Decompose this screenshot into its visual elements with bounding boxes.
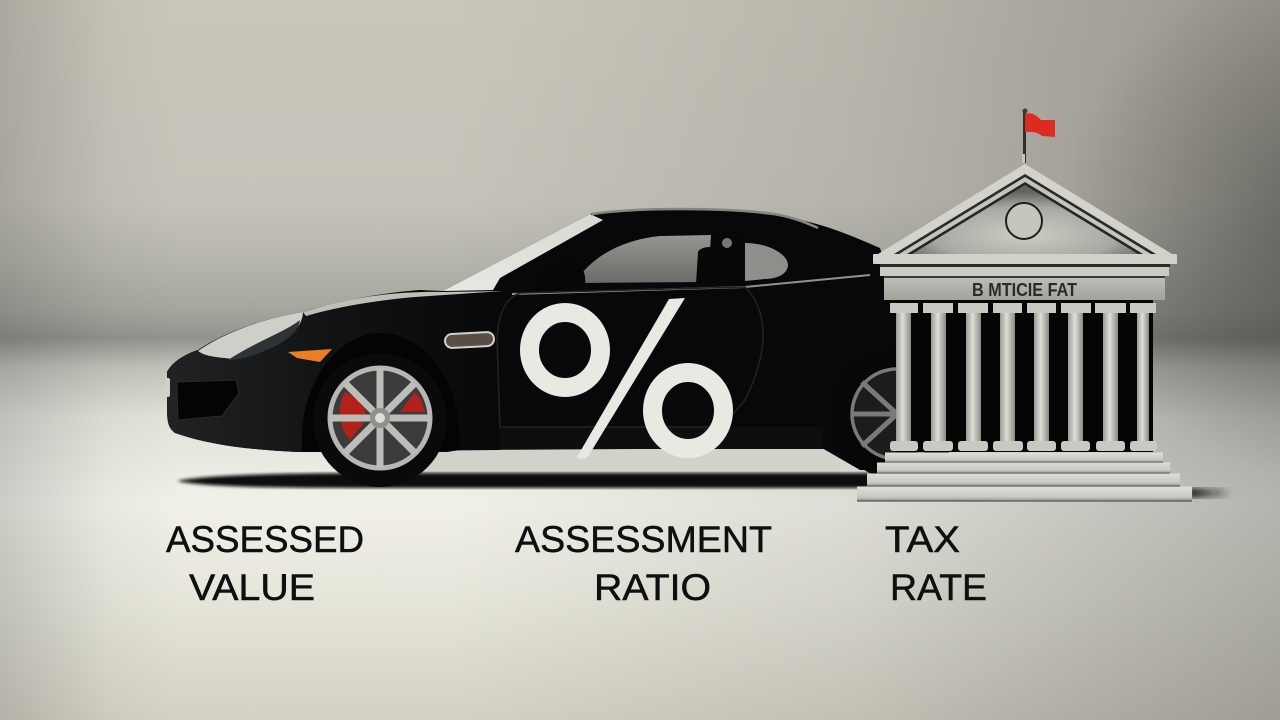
columns — [890, 303, 1157, 451]
label: assessment ratio — [515, 519, 772, 608]
car beltline highlight — [512, 275, 870, 294]
label: assessment ratio: ASSESSMENT — [515, 519, 772, 560]
car mirror — [534, 263, 585, 291]
label: tax rate — [885, 519, 987, 608]
car side window — [575, 235, 711, 283]
car hood highlight — [303, 291, 503, 316]
icon: government building — [857, 108, 1192, 502]
car grille — [177, 380, 239, 420]
car headlight — [198, 312, 303, 360]
label: tax rate: RATE — [890, 567, 987, 608]
entablature — [873, 254, 1177, 300]
ground under car — [400, 446, 840, 476]
rear wheel — [833, 351, 961, 479]
front wheel well — [302, 333, 460, 452]
building inscription: B MTICIE FAT — [972, 280, 1077, 300]
label: tax rate: TAX — [885, 519, 960, 560]
dark interior — [896, 300, 1153, 452]
car front fender — [167, 292, 503, 452]
label: assessed value: ASSESSED — [166, 519, 364, 560]
car windshield — [443, 214, 603, 291]
pediment — [878, 164, 1172, 254]
label: assessed value: VALUE — [189, 567, 315, 608]
car nose highlight — [165, 378, 170, 397]
car side vent — [445, 332, 494, 348]
car seat and pillar — [696, 235, 745, 284]
icon: black sports car — [165, 208, 961, 487]
steps — [857, 452, 1192, 502]
car rear window — [745, 243, 788, 281]
icon: percent sign — [530, 298, 724, 459]
car door lines — [497, 287, 763, 427]
flag — [1022, 108, 1055, 163]
front wheel — [313, 353, 447, 487]
car indicator — [288, 349, 332, 362]
car body — [167, 208, 896, 470]
car roof highlight — [592, 209, 818, 228]
label: assessed value — [166, 519, 364, 608]
label: assessment ratio: RATIO — [594, 567, 711, 608]
car sill — [500, 427, 823, 449]
ground shadow — [177, 473, 1232, 498]
